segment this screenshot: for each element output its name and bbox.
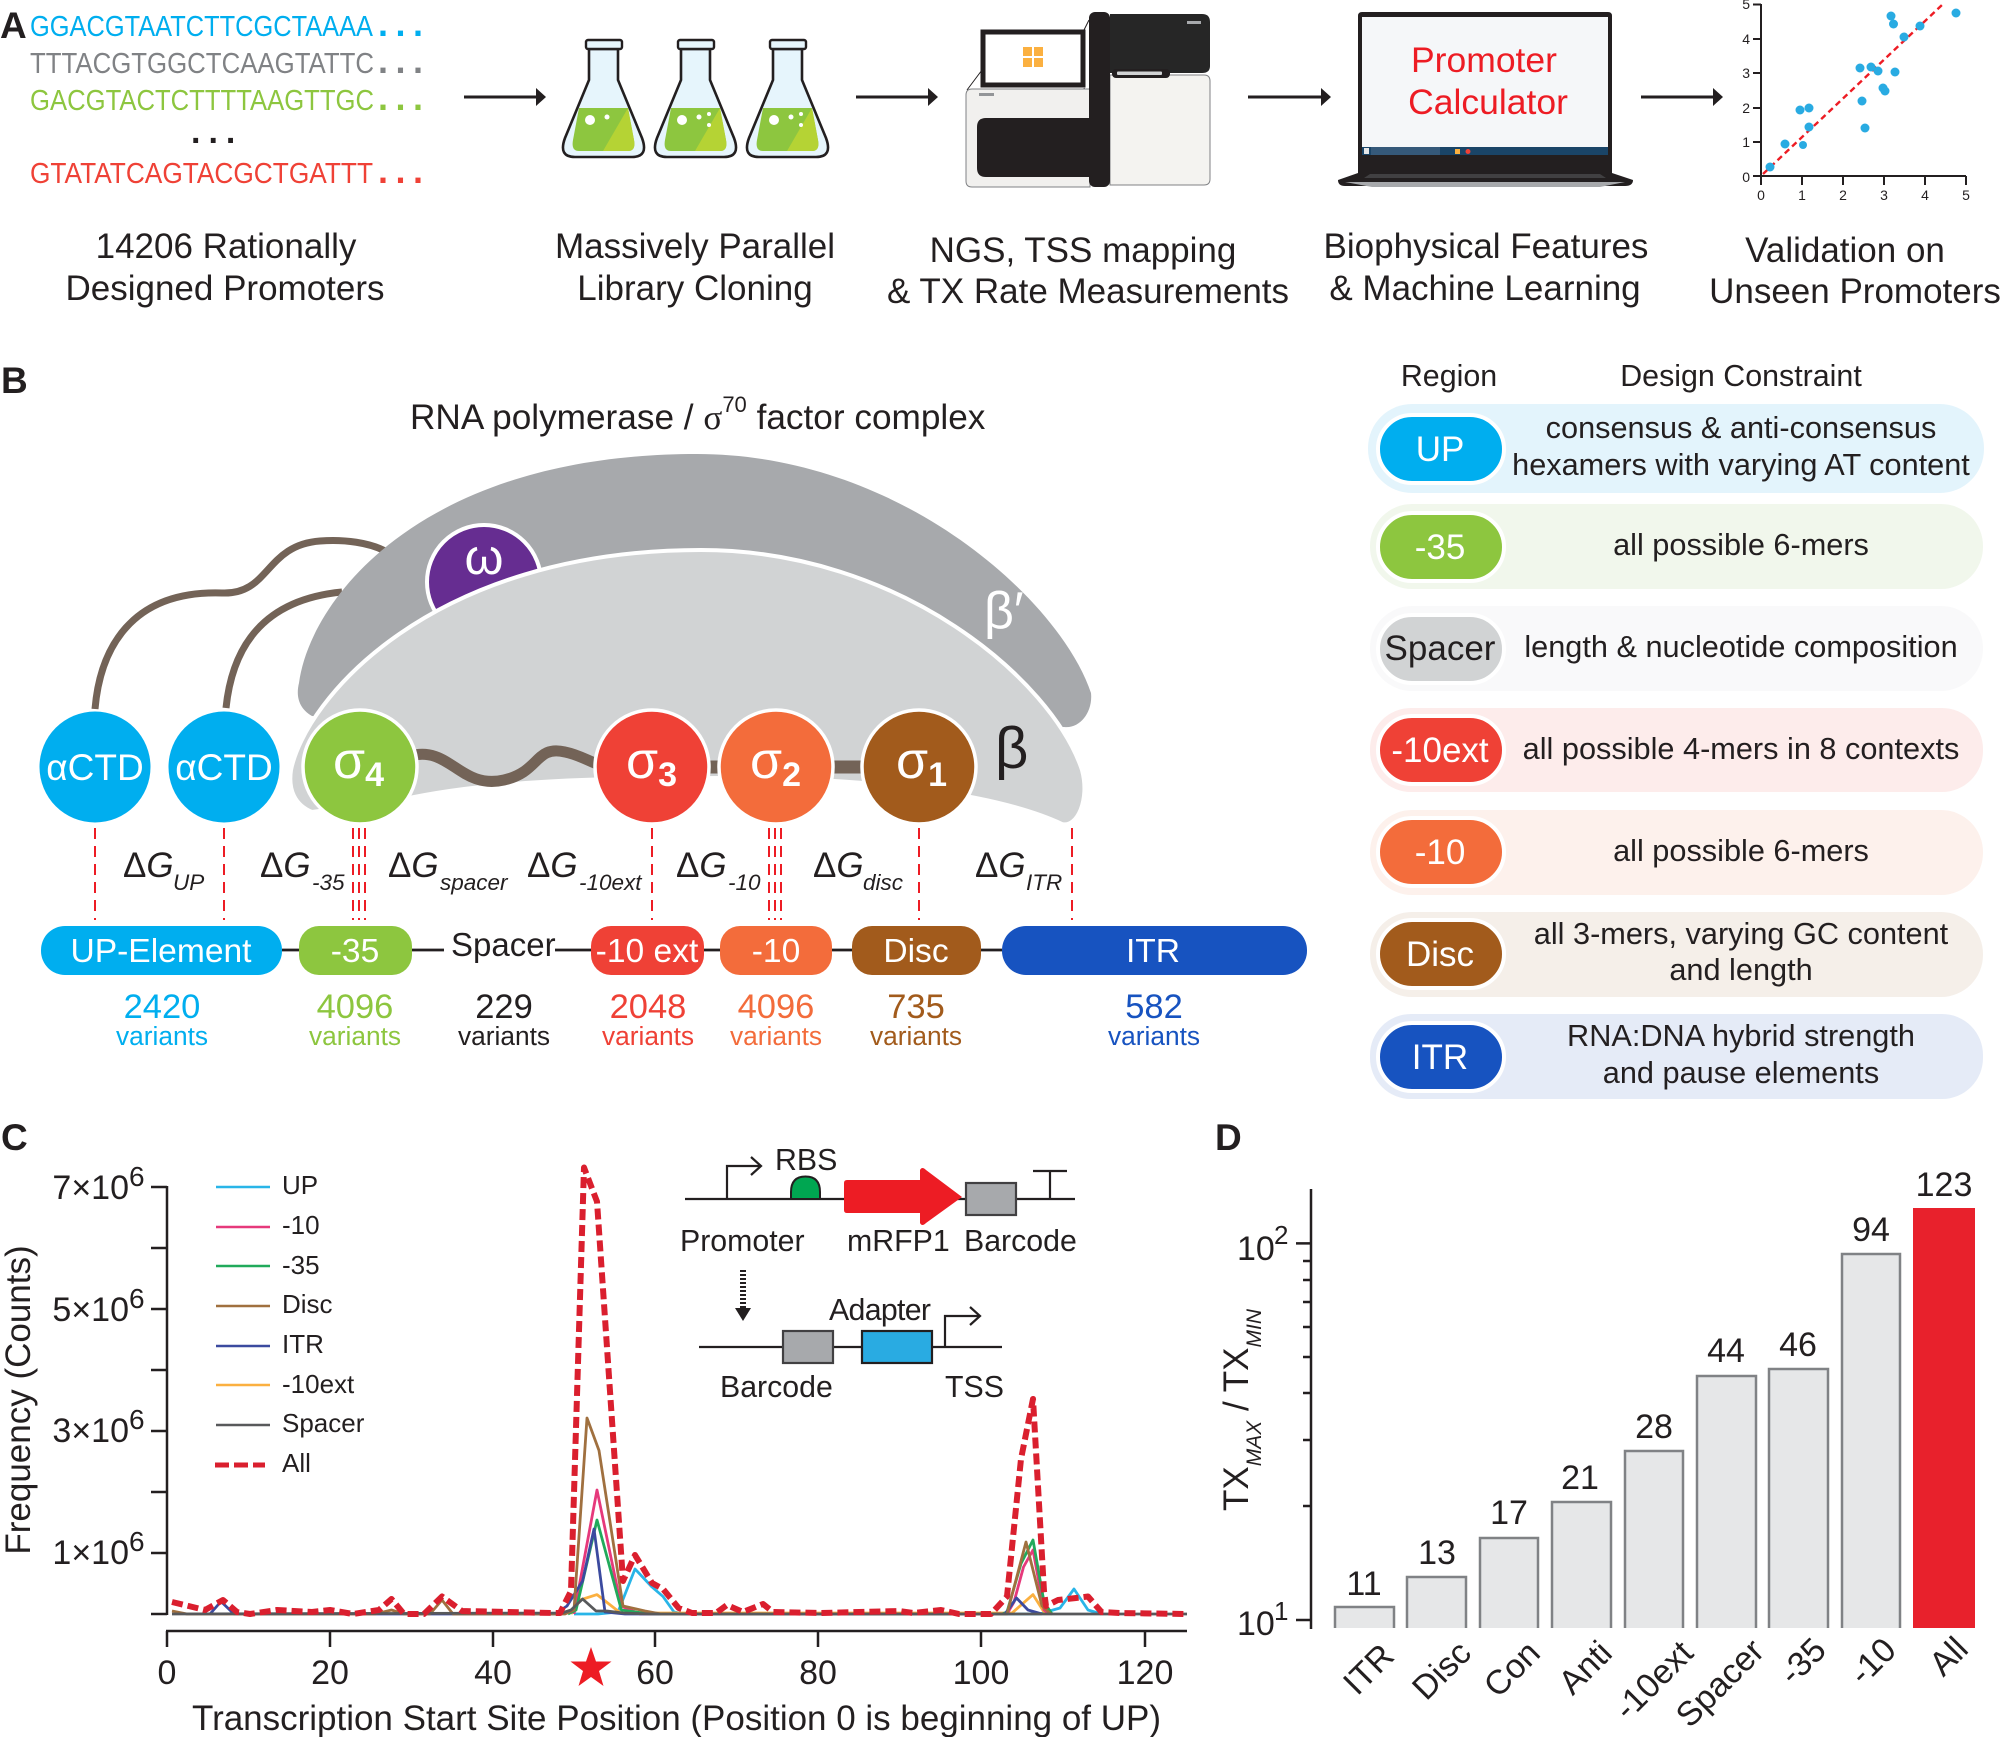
delta G labels: spacer [440,870,509,895]
promoter sequences: ... [191,113,243,151]
y-axis title: / TX [1217,1347,1256,1421]
row: ITR [1370,1014,1983,1099]
row: Disc: Disc [1406,935,1474,974]
circle: sigma 4 [303,710,417,824]
x labels: Disc [1405,1634,1479,1707]
y tick labels: 10 [1237,1230,1275,1268]
circle: sigma 2: 2 [782,756,801,794]
caption: validation: Validation on [1745,231,1945,270]
y-axis title: MAX [1243,1420,1266,1466]
variant counts: variants [116,1021,208,1051]
x labels: -10ext [1607,1633,1701,1727]
caption: biophysical: Biophysical Features [1324,227,1648,266]
circle: alpha CTD 2: αCTD [175,747,273,788]
table headers: Region [1401,359,1497,393]
delta G labels: -35 [312,870,345,895]
row: -10: all possible 6-mers [1613,833,1869,868]
table headers [1401,359,1862,393]
delta G labels: ΔG [975,846,1026,885]
delta G labels: ΔG [123,846,174,885]
inset: reporter construct: Adapter [829,1294,931,1327]
bar values: 11 [1346,1565,1382,1603]
chart: validation scatter: 1 [1742,134,1750,150]
x labels: All [1922,1630,1976,1683]
y tick labels: 1×10 [52,1534,129,1572]
promoter sequences: GGACGTAATCTTCGCTAAAA [30,11,374,43]
y tick labels [1237,1220,1288,1643]
variant counts: 4096 [738,988,814,1026]
variant counts: variants [602,1021,694,1051]
circle: sigma 2: σ [750,732,782,790]
linker: sigma domain wave [410,751,880,781]
circle: sigma 3 [595,710,709,824]
y tick labels: 7×10 [52,1169,129,1207]
legend: UP [282,1170,318,1200]
bar values [1346,1166,1972,1603]
delta G labels: ΔG [527,846,578,885]
promoter track: ITR [1126,933,1180,970]
y tick labels: 1 [1274,1596,1288,1626]
red contact dashes [95,828,1072,920]
icon: flasks [563,40,828,157]
row: -10 [1370,810,1983,895]
inset: reporter construct: TSS [945,1371,1004,1404]
bar values: 17 [1490,1494,1528,1532]
inset: reporter construct: RBS [775,1144,837,1177]
screen text: Promoter [1411,40,1557,80]
row: Spacer: length & nucleotide composition [1524,629,1958,664]
variant counts: 4096 [317,988,393,1026]
legend: Spacer [282,1408,365,1438]
delta G labels: ΔG [676,846,727,885]
y tick labels: 2 [1274,1220,1288,1250]
circle: sigma 1: 1 [928,756,947,794]
row: Spacer: Spacer [1385,629,1496,668]
inset: reporter construct [680,1144,1077,1404]
caption: NGS: NGS, TSS mapping [930,231,1236,270]
row: UP [1368,404,1984,493]
legend: All [282,1448,311,1478]
bar values: 46 [1779,1326,1817,1364]
promoter sequences: ... [378,77,431,118]
inset: reporter construct: Barcode [964,1225,1077,1258]
variant counts: variants [730,1021,822,1051]
row: -10ext [1370,708,1983,792]
panel letter B: B [1,360,28,401]
row: ITR: and pause elements [1603,1055,1879,1090]
x tick labels: 0 [158,1654,176,1692]
x labels: Con [1477,1634,1548,1705]
promoter sequences: TTTACGTGGCTCAAGTATTC [30,48,374,80]
panel D: dynamic range bar chart [1215,1117,1976,1735]
variant counts: variants [309,1021,401,1051]
x labels: -10 [1842,1631,1904,1692]
legend [215,1170,365,1478]
row: ITR: RNA:DNA hybrid strength [1567,1018,1915,1053]
circle: sigma 3: 3 [658,756,677,794]
promoter sequences [30,3,431,191]
x tick labels: 120 [1117,1654,1173,1692]
y tick labels: 6 [129,1283,145,1314]
panel letter C: C [1,1117,28,1158]
bar values: 44 [1707,1332,1745,1370]
promoter sequences: GACGTACTCTTTTAAGTTGC [30,85,374,117]
caption: cloning: Library Cloning [577,269,813,308]
delta G labels: UP [173,870,204,895]
y-axis title: TX [1217,1466,1256,1511]
panel letter A: A [0,5,27,46]
caption: promoters: Designed Promoters [65,269,385,308]
chart: validation scatter: 0 [1742,169,1750,185]
chart: validation scatter: 5 [1962,187,1970,203]
screen text: Calculator [1408,82,1568,122]
x-axis title: Transcription Start Site Position (Position 0 is beginning of UP) [192,1699,1161,1737]
variant counts: 229 [475,988,533,1026]
variant counts: 2420 [124,988,200,1026]
x labels: -35 [1772,1631,1834,1692]
circle: alpha CTD 1: αCTD [46,747,144,788]
delta G labels [123,846,1062,895]
variant counts: 735 [887,988,945,1026]
complex title: RNA polymerase / σ [410,398,722,437]
circle: sigma 4: 4 [365,756,384,794]
variant counts: 2048 [610,988,686,1026]
chart: validation scatter [1742,0,1970,203]
promoter sequences: ... [378,3,431,44]
caption: cloning: Massively Parallel [555,227,835,266]
arrow 3 [1248,88,1331,106]
panel A: pipeline overview [0,0,2000,311]
bar values: 13 [1418,1534,1456,1572]
x tick labels: 20 [311,1654,349,1692]
x labels: Anti [1551,1634,1620,1702]
promoter track: -10 [752,933,800,970]
variant counts: 582 [1125,988,1183,1026]
inset: reporter construct: Promoter [680,1225,805,1258]
y axis [151,1186,167,1615]
x tick labels: 60 [636,1654,674,1692]
row: UP: hexamers with varying AT content [1512,447,1970,482]
promoter track: -35 [331,933,379,970]
arrow 4 [1641,88,1723,106]
line chart [172,1168,1187,1614]
delta G labels: ΔG [388,846,439,885]
chart: validation scatter: 2 [1839,187,1847,203]
x labels: ITR [1336,1637,1402,1702]
bar values: 28 [1635,1408,1673,1446]
y-axis title: Frequency (Counts) [0,1245,38,1555]
complex title: 70 [722,392,747,417]
row: UP: UP [1416,430,1464,469]
promoter track: -10 ext [596,933,699,970]
y tick labels: 6 [129,1161,145,1192]
inset: reporter construct: mRFP1 [847,1225,950,1258]
linker: alpha CTD tethers [95,540,385,709]
chart: validation scatter: 4 [1742,31,1750,47]
chart: validation scatter: 3 [1880,187,1888,203]
row: Disc: all 3-mers, varying GC content [1534,916,1949,951]
inset: reporter construct: Barcode [720,1371,833,1404]
promoter sequences: ... [378,40,431,81]
variant counts: variants [1108,1021,1200,1051]
arrow 1 [464,88,546,106]
y tick labels: 6 [129,1526,145,1557]
complex title: factor complex [747,398,986,437]
x labels [1336,1630,1976,1735]
chart: validation scatter: 2 [1742,100,1750,116]
label: beta: β [995,716,1028,781]
icon: omega subunit [427,525,541,639]
y-axis title: MIN [1243,1308,1266,1347]
row: -35 [1370,504,1983,589]
row: -10ext: all possible 4-mers in 8 contexts [1523,731,1959,766]
promoter track: Spacer [451,926,556,963]
icon: sequencer [966,12,1210,187]
row: Spacer [1370,606,1983,691]
panel C: TSS position frequency chart [0,1117,1187,1737]
arrow 2 [856,88,938,106]
shape: beta subunit [290,550,1084,824]
caption: biophysical: & Machine Learning [1329,269,1641,308]
bar values: 94 [1852,1211,1890,1249]
panel: design constraint table [1368,359,1984,1099]
promoter sequences: ... [378,150,431,191]
y tick labels [52,1161,145,1572]
caption: promoters: 14206 Rationally [96,227,357,266]
legend: -10ext [282,1369,355,1399]
promoter sequences: GTATATCAGTACGCTGATTT [30,158,373,190]
delta G labels: disc [863,870,903,895]
legend: -10 [282,1210,320,1240]
x tick labels [158,1654,1173,1692]
legend: ITR [282,1329,324,1359]
icon: red star [570,1647,612,1686]
table headers: Design Constraint [1620,359,1862,393]
panel B: RNA polymerase complex [1,360,1307,1051]
row: -35: -35 [1415,528,1465,567]
promoter track: Disc [883,933,949,970]
bar values: 21 [1561,1459,1599,1497]
shape: beta prime subunit [298,454,1091,740]
panel letter D: D [1215,1117,1242,1158]
x axis [166,1631,1187,1647]
variant counts [116,988,1200,1051]
promoter track [41,926,1307,975]
delta G labels: ITR [1026,870,1062,895]
circle: sigma 1 [862,710,976,824]
variant counts: variants [870,1021,962,1051]
y axis [1296,1189,1311,1629]
caption: validation: Unseen Promoters [1709,272,2000,311]
row: Disc [1370,912,1983,997]
icon: omega subunit: ω [464,529,504,585]
promoter track: UP-Element [70,933,252,970]
circle: sigma 3: σ [626,732,658,790]
label: beta prime: β′ [984,582,1024,640]
circle: alpha CTD 1 [40,712,150,822]
x tick labels: 40 [474,1654,512,1692]
caption: NGS: & TX Rate Measurements [887,272,1289,311]
variant counts: variants [458,1021,550,1051]
x labels: Spacer [1669,1632,1772,1735]
chart: validation scatter: 0 [1757,187,1765,203]
circle: sigma 4: σ [333,732,365,790]
chart: validation scatter: 3 [1742,65,1750,81]
bars [1335,1208,1975,1628]
row: -10ext: -10ext [1391,731,1489,770]
bar values: 123 [1916,1166,1972,1204]
y tick labels: 5×10 [52,1291,129,1329]
legend: -35 [282,1250,320,1280]
x tick labels: 80 [799,1654,837,1692]
icon: laptop with promoter calculator [1338,12,1633,187]
row: UP: consensus & anti-consensus [1546,410,1936,445]
delta G labels: -10ext [579,870,643,895]
x tick labels: 100 [953,1654,1009,1692]
chart: validation scatter: 1 [1798,187,1806,203]
delta G labels: ΔG [813,846,864,885]
row: Disc: and length [1669,952,1813,987]
row: -10: -10 [1415,833,1465,872]
delta G labels: -10 [728,870,761,895]
chart: validation scatter: 4 [1921,187,1929,203]
circle: sigma 2 [719,710,833,824]
circle: alpha CTD 2 [168,712,280,822]
y tick labels: 3×10 [52,1412,129,1450]
circle: sigma 1: σ [896,732,928,790]
y tick labels: 10 [1237,1605,1275,1643]
y tick labels: 6 [129,1404,145,1435]
delta G labels: ΔG [260,846,311,885]
legend: Disc [282,1289,333,1319]
row: ITR: ITR [1412,1038,1468,1077]
row: -35: all possible 6-mers [1613,527,1869,562]
